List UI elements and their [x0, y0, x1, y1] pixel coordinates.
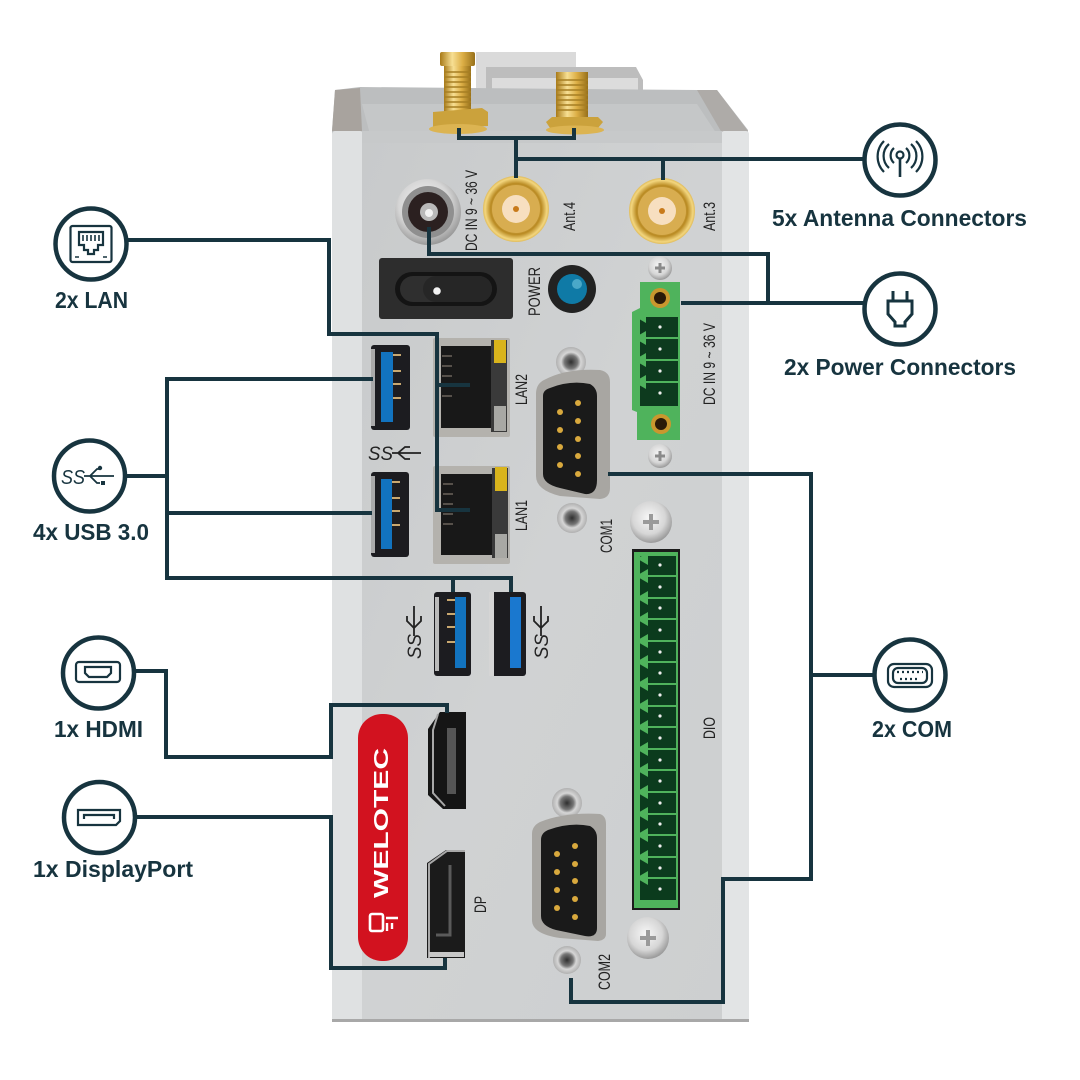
USB port 3 [434, 592, 471, 676]
panel printed labels: DP [471, 896, 490, 913]
rocker switch [379, 258, 513, 319]
green DIO terminal [632, 549, 680, 910]
icon: plug [864, 274, 936, 344]
connector lines: LAN [127, 240, 470, 510]
HDMI port [428, 712, 466, 809]
icon: antenna [864, 124, 936, 196]
COM2 serial connector [532, 788, 606, 974]
printed USB symbol left: SS [405, 634, 426, 659]
side strip left [332, 131, 363, 1021]
device: industrial PC [332, 52, 749, 1022]
connector lines: USB [125, 379, 511, 592]
callout: LAN [55, 208, 128, 313]
connector lines: power [429, 227, 864, 303]
connector lines: antenna [459, 128, 864, 180]
icon: HDMI [63, 638, 134, 708]
USB port 1 [371, 345, 410, 430]
label: 1x DisplayPort: 1x DisplayPort [33, 856, 193, 882]
icon: DisplayPort [64, 782, 135, 853]
icon: LAN [56, 208, 126, 280]
label: 2x LAN: 2x LAN [55, 287, 128, 313]
printed USB symbol horizontal [368, 444, 421, 465]
panel printed labels: Ant.3 [700, 202, 719, 231]
rear bracket [476, 52, 643, 112]
panel printed labels [462, 170, 719, 990]
callout: USB [33, 440, 149, 545]
icon: COM [874, 640, 946, 710]
power LED [548, 265, 596, 313]
large screw lower [627, 917, 669, 959]
small screw above power terminal [648, 256, 672, 280]
printed USB symbol right [532, 606, 553, 659]
large screw upper [630, 501, 672, 543]
DisplayPort port [427, 850, 465, 958]
label: 5x Antenna Connectors: 5x Antenna Connectors [772, 205, 1027, 231]
LAN1 port [433, 466, 510, 564]
top antenna connector left [429, 52, 488, 134]
printed USB symbol left [405, 606, 426, 659]
callout: antenna [772, 124, 1027, 231]
panel printed labels: LAN1 [512, 500, 531, 531]
green power terminal [632, 282, 680, 440]
USB port 2 [371, 472, 409, 557]
front panel [362, 140, 722, 1021]
printed USB symbol horizontal: SS [368, 444, 393, 465]
USB port 4 [489, 592, 526, 676]
callout: DisplayPort [33, 782, 193, 882]
panel printed labels: DC IN 9 ~ 36 V [700, 323, 719, 405]
callout: power [784, 274, 1016, 380]
connector lines: HDMI [135, 671, 447, 757]
panel printed labels: LAN2 [512, 374, 531, 405]
DC jack [395, 179, 461, 245]
top face of housing [332, 87, 748, 140]
panel printed labels: COM2 [595, 954, 614, 990]
COM1 serial connector [536, 347, 610, 533]
connector lines: COM [571, 474, 873, 1002]
antenna socket Ant.4 [483, 176, 549, 242]
label: 2x Power Connectors: 2x Power Connectors [784, 354, 1016, 380]
label: 2x COM: 2x COM [872, 716, 952, 742]
label: 1x HDMI: 1x HDMI [54, 716, 143, 742]
icon: USB 3.0: SS [61, 467, 86, 489]
logo badge: Welotec [358, 714, 408, 961]
antenna socket Ant.3 [629, 178, 695, 244]
callout: HDMI [54, 638, 143, 742]
callout: COM [872, 640, 952, 742]
LAN2 port [433, 338, 510, 437]
panel printed labels: Ant.4 [560, 202, 579, 231]
printed USB symbol right: SS [532, 634, 553, 659]
connector lines: DisplayPort [136, 817, 445, 968]
panel printed labels: DC IN 9 ~ 36 V [462, 170, 481, 251]
small screw below power terminal [648, 444, 672, 468]
top antenna connector right [546, 72, 604, 134]
panel printed labels: DIO [700, 717, 719, 739]
panel printed labels: COM1 [597, 519, 616, 553]
side strip right [721, 131, 749, 1021]
panel printed labels: POWER [525, 267, 544, 316]
label: 4x USB 3.0: 4x USB 3.0 [33, 519, 149, 545]
logo badge: Welotec: WELOTEC [371, 748, 393, 898]
